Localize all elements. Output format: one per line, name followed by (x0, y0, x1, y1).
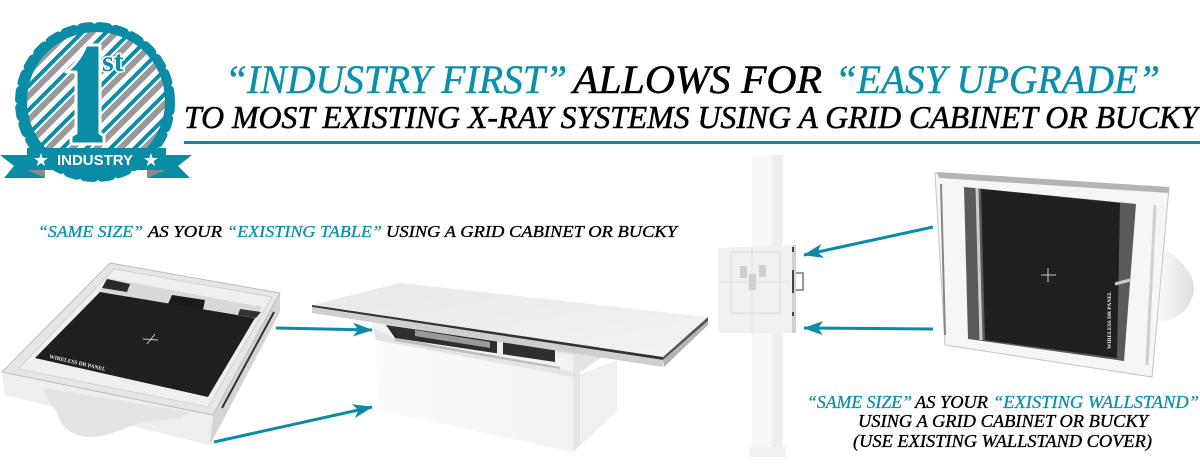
caption: wallstand: (USE EXISTING WALLSTAND COVER) (853, 431, 1152, 452)
caption: table: “EXISTING TABLE” (227, 222, 382, 241)
photo: wireless panel in wallstand tray: WIRELESS DR PANEL (1107, 291, 1113, 349)
caption: wallstand (807, 392, 1199, 452)
title (184, 57, 1200, 135)
caption: wallstand: USING A GRID CABINET OR BUCKY (858, 411, 1150, 431)
photo: wireless panel in wallstand tray (935, 172, 1194, 377)
arrow: tray to table top (276, 328, 372, 330)
caption: table: “SAME SIZE” (38, 222, 143, 241)
badge: 1st industry: st (102, 45, 124, 78)
title: “INDUSTRY FIRST” (225, 57, 567, 102)
photo: wallstand (718, 155, 803, 457)
badge: 1st industry: ★ (33, 150, 49, 171)
title: ALLOWS FOR (570, 57, 822, 102)
arrow: wall panel lower (804, 328, 933, 329)
title: TO MOST EXISTING X-RAY SYSTEMS USING A GRID CABINET OR BUCKY (184, 99, 1200, 135)
caption: wallstand: AS YOUR (914, 392, 988, 412)
photo: x-ray table (312, 283, 708, 452)
caption: wallstand: “EXISTING WALLSTAND” (993, 392, 1199, 412)
badge: 1st industry: INDUSTRY (57, 152, 133, 169)
photo: wireless panel in table tray (2, 263, 280, 445)
caption: table (38, 222, 679, 241)
caption: table: AS YOUR (147, 222, 223, 241)
arrow: wall panel upper (804, 227, 933, 255)
photo: wireless panel in table tray: WIRELESS DR PANEL (49, 354, 106, 373)
title rule (184, 141, 1200, 144)
badge: 1st industry (0, 27, 192, 178)
title: “EASY UPGRADE” (835, 57, 1160, 102)
arrow: tray to table base (214, 407, 372, 442)
caption: table: USING A GRID CABINET OR BUCKY (386, 222, 679, 241)
badge: 1st industry: ★ (143, 150, 159, 171)
caption: wallstand: “SAME SIZE” (807, 392, 912, 412)
